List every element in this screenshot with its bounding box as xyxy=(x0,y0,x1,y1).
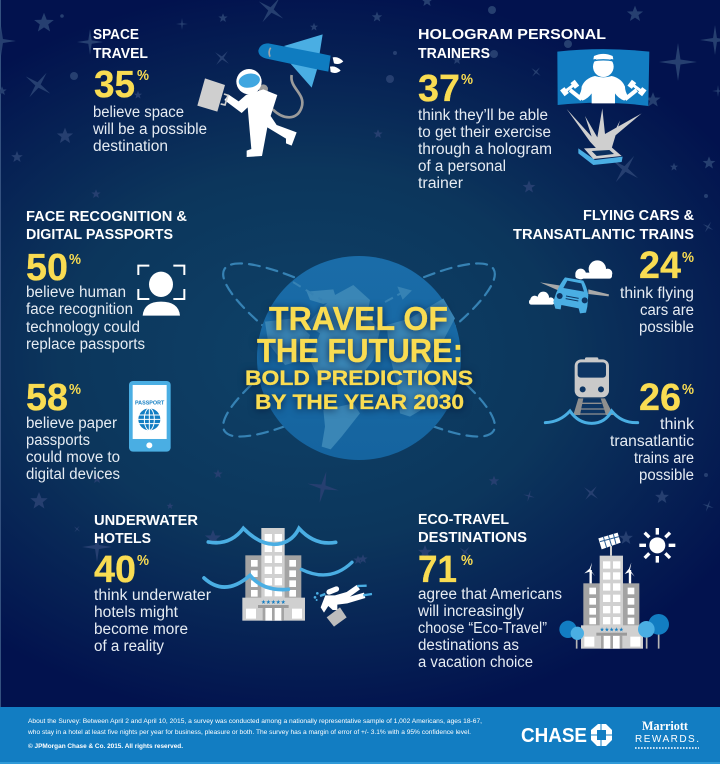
panel: face recognition and digital passports: could move to xyxy=(26,449,120,466)
panel: face recognition and digital passports: DIGITAL PASSPORTS xyxy=(26,227,173,243)
panel: flying cars and transatlantic trains: transatlantic xyxy=(610,433,694,450)
globe with orbits xyxy=(206,238,512,462)
panel: underwater hotels: % xyxy=(137,552,149,569)
panel: eco-travel destinations: a vacation choice xyxy=(418,654,533,671)
panel: flying cars and transatlantic trains: think flying xyxy=(620,285,694,302)
icon: passport phone: PASSPORT xyxy=(135,401,165,407)
panel: eco-travel destinations: DESTINATIONS xyxy=(418,530,527,546)
Chase logo: CHASE xyxy=(521,725,587,747)
panel: face recognition and digital passports: believe human xyxy=(26,284,126,301)
panel: face recognition and digital passports: technology could xyxy=(26,319,140,336)
panel: space travel: TRAVEL xyxy=(93,46,148,62)
orbit front arcs xyxy=(293,282,410,302)
panel: eco-travel destinations: % xyxy=(461,552,473,569)
panel: eco-travel destinations xyxy=(417,512,562,671)
panel: flying cars and transatlantic trains xyxy=(513,208,695,484)
survey note: who stay in a hotel at least five nights per year for business, pleasure or both. The survey has a margin of error of +/- 3.1% with a 95% confidence level. xyxy=(27,729,471,736)
panel: face recognition and digital passports: passports xyxy=(26,432,90,449)
Marriott Rewards logo xyxy=(635,718,699,748)
panel: flying cars and transatlantic trains: % xyxy=(682,249,694,266)
panel: hologram personal trainers: to get their exercise xyxy=(418,124,551,141)
title: BY THE YEAR 2030 xyxy=(255,391,464,414)
panel: space travel xyxy=(92,27,207,155)
panel: underwater hotels: UNDERWATER xyxy=(94,513,199,529)
panel: eco-travel destinations: 71 xyxy=(418,549,457,591)
background stars xyxy=(0,0,720,564)
panel: underwater hotels: HOTELS xyxy=(94,531,151,547)
panel: hologram personal trainers: HOLOGRAM PERSONAL xyxy=(418,27,606,43)
panel: flying cars and transatlantic trains: % xyxy=(682,381,694,398)
panel: space travel: % xyxy=(137,67,149,84)
panel: face recognition and digital passports: 50 xyxy=(26,247,68,289)
footer xyxy=(0,707,720,764)
icon: train on water xyxy=(545,357,638,423)
icon: underwater hotel and diver xyxy=(204,528,372,627)
panel: face recognition and digital passports xyxy=(26,209,188,483)
panel: space travel: believe space xyxy=(93,104,184,121)
panel: space travel: SPACE xyxy=(93,27,139,43)
panel: hologram personal trainers xyxy=(418,27,606,192)
panel: space travel: will be a possible xyxy=(92,121,207,138)
icon: face scan xyxy=(138,266,184,316)
panel: face recognition and digital passports: face recognition xyxy=(26,301,133,318)
panel: underwater hotels xyxy=(94,513,211,655)
panel: space travel: destination xyxy=(93,138,168,155)
orbit rings xyxy=(206,238,512,462)
icon: eco hotel: ★★★★★ xyxy=(600,627,624,634)
panel: flying cars and transatlantic trains: possible xyxy=(639,467,694,484)
panel: eco-travel destinations: choose “Eco-Travel” xyxy=(418,620,547,637)
title xyxy=(245,300,473,414)
panel: eco-travel destinations: agree that Americans xyxy=(418,586,562,603)
icon: passport phone xyxy=(129,381,171,452)
panel: flying cars and transatlantic trains: 24 xyxy=(639,245,681,287)
panel: hologram personal trainers: trainer xyxy=(418,175,463,192)
survey note: About the Survey: Between April 2 and April 10, 2015, a survey was conducted among a nationally representative sample of 1,002 Americans, ages 18-67, xyxy=(28,718,482,725)
panel: flying cars and transatlantic trains: possible xyxy=(639,319,694,336)
panel: face recognition and digital passports: digital devices xyxy=(26,466,120,483)
icon: flying car xyxy=(529,260,612,313)
icon: eco hotel xyxy=(559,528,675,649)
panel: hologram personal trainers: of a personal xyxy=(418,158,506,175)
panel: eco-travel destinations: ECO-TRAVEL xyxy=(418,512,509,528)
title: THE FUTURE: xyxy=(257,332,463,369)
panel: flying cars and transatlantic trains: TRANSATLANTIC TRAINS xyxy=(513,227,694,243)
panel: hologram personal trainers: 37 xyxy=(418,68,460,110)
panel: hologram personal trainers: think they’ll be able xyxy=(418,107,548,124)
panel: flying cars and transatlantic trains: think xyxy=(660,416,694,433)
panel: face recognition and digital passports: replace passports xyxy=(26,336,145,353)
panel: flying cars and transatlantic trains: FLYING CARS & xyxy=(583,208,695,224)
panel: underwater hotels: think underwater xyxy=(94,587,211,604)
panel: underwater hotels: become more xyxy=(94,621,188,638)
panel: hologram personal trainers: TRAINERS xyxy=(418,46,490,62)
panel: space travel: 35 xyxy=(94,64,135,106)
panel: face recognition and digital passports: 58 xyxy=(26,377,68,419)
panel: flying cars and transatlantic trains: trains are xyxy=(634,450,694,467)
title: TRAVEL OF xyxy=(269,300,448,337)
globe sphere xyxy=(257,256,461,460)
panel: eco-travel destinations: destinations as xyxy=(418,637,519,654)
title: BOLD PREDICTIONS xyxy=(245,367,473,390)
panel: face recognition and digital passports: % xyxy=(69,381,81,398)
panel: hologram personal trainers: % xyxy=(461,71,473,88)
panel: hologram personal trainers: through a hologram xyxy=(418,141,552,158)
panel: face recognition and digital passports: believe paper xyxy=(26,415,117,432)
icon: astronaut and shuttle xyxy=(197,34,343,157)
Marriott Rewards logo: Marriott xyxy=(642,718,689,733)
survey note: © JPMorgan Chase & Co. 2015. All rights reserved. xyxy=(28,742,183,750)
panel: face recognition and digital passports: FACE RECOGNITION & xyxy=(26,209,188,225)
icon: underwater hotel and diver: ★★★★★ xyxy=(261,599,286,606)
panel: underwater hotels: hotels might xyxy=(94,604,179,621)
panel: underwater hotels: 40 xyxy=(94,549,136,591)
continents xyxy=(265,285,455,449)
panel: eco-travel destinations: will increasingly xyxy=(417,603,524,620)
panel: flying cars and transatlantic trains: 26 xyxy=(639,377,681,419)
survey note xyxy=(27,718,482,750)
panel: face recognition and digital passports: % xyxy=(69,251,81,268)
panel: flying cars and transatlantic trains: cars are xyxy=(640,302,694,319)
panel: underwater hotels: of a reality xyxy=(94,638,164,655)
Marriott Rewards logo: REWARDS. xyxy=(635,734,699,745)
icon: hologram trainer xyxy=(557,49,649,165)
